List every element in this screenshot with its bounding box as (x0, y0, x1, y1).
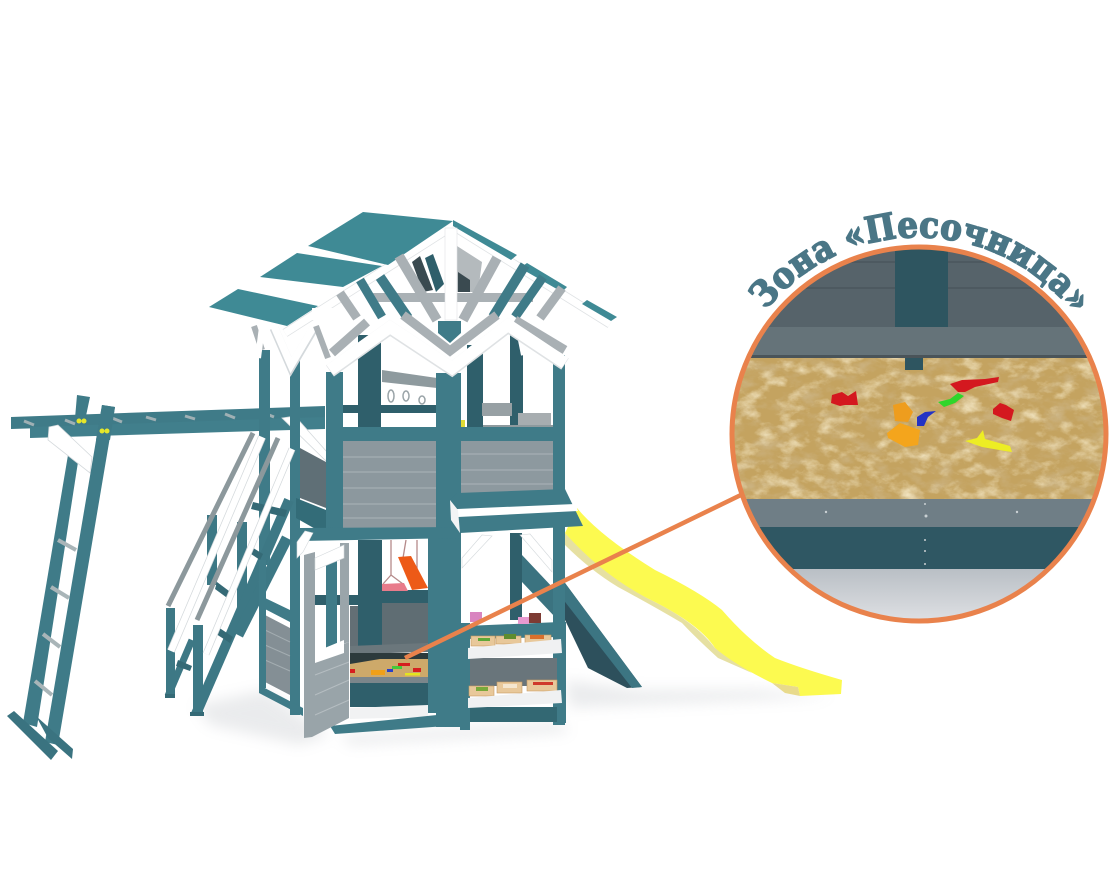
lower shelf boxes (469, 680, 557, 696)
side tower structure (259, 350, 326, 715)
roof (209, 212, 617, 371)
yellow slide (565, 508, 842, 696)
monkey bar rungs (24, 413, 274, 425)
screws (825, 503, 1018, 565)
teal chevron center (438, 321, 461, 343)
inner gable shading (412, 246, 482, 292)
lower back wall (315, 595, 428, 646)
stairs (165, 433, 292, 716)
ladder rails (23, 395, 115, 745)
gray bracing (340, 256, 562, 320)
ladder rungs (35, 540, 76, 695)
mini sandbox (350, 643, 428, 719)
upper gray walls (343, 438, 553, 528)
back posts and back beams (343, 332, 523, 647)
stair stringers (168, 500, 289, 714)
roof panels (209, 212, 617, 326)
yellow bolts (76, 418, 110, 434)
callout line (405, 493, 745, 658)
upper white shelf (468, 639, 562, 659)
market shop counter (460, 612, 566, 730)
stair feet (165, 694, 204, 716)
swing (382, 540, 428, 591)
front ledge (730, 499, 1110, 527)
monkey bar beams (11, 406, 325, 429)
sand (730, 354, 1110, 500)
side gussets (254, 325, 524, 367)
circle ring (732, 247, 1106, 621)
ground shadows (195, 680, 835, 745)
stair handrails (168, 433, 292, 654)
upper rail and main posts (300, 355, 565, 727)
curved title: Зона «Песочница» (748, 212, 1084, 308)
play tower frame (259, 332, 583, 738)
toys on counter top (470, 612, 541, 624)
upper gray wall (768, 251, 1070, 327)
small canopy (450, 489, 583, 572)
lower left wall (259, 560, 303, 716)
side gray wall (300, 448, 326, 508)
white side struts (297, 531, 313, 558)
floor (794, 569, 1044, 618)
upper shelf boxes (471, 635, 551, 646)
stair treads (176, 502, 287, 671)
stair posts (166, 515, 247, 715)
ladder feet (7, 711, 73, 760)
wall post (895, 244, 948, 328)
sand toys (831, 377, 1014, 452)
white braces (48, 416, 327, 473)
bench board (752, 327, 1086, 355)
teal bracing (360, 265, 543, 318)
slide climbing ramp (522, 555, 642, 688)
monkey bars and climbing ladder (7, 395, 327, 760)
open door (304, 543, 349, 738)
lower white shelf (468, 690, 562, 708)
front lower posts and bottom beam (330, 538, 460, 734)
gray chevrons (332, 315, 565, 353)
white rafters (285, 226, 610, 333)
side deck (296, 498, 326, 535)
center king post (445, 228, 457, 320)
back-wall equipment (382, 370, 553, 428)
white W chevron (330, 325, 565, 371)
horizontal roof beams (312, 293, 562, 320)
ladder post front of beam (96, 405, 115, 440)
front beam (760, 527, 1078, 569)
magnified sandbox circle (730, 240, 1110, 629)
side posts (259, 350, 300, 715)
